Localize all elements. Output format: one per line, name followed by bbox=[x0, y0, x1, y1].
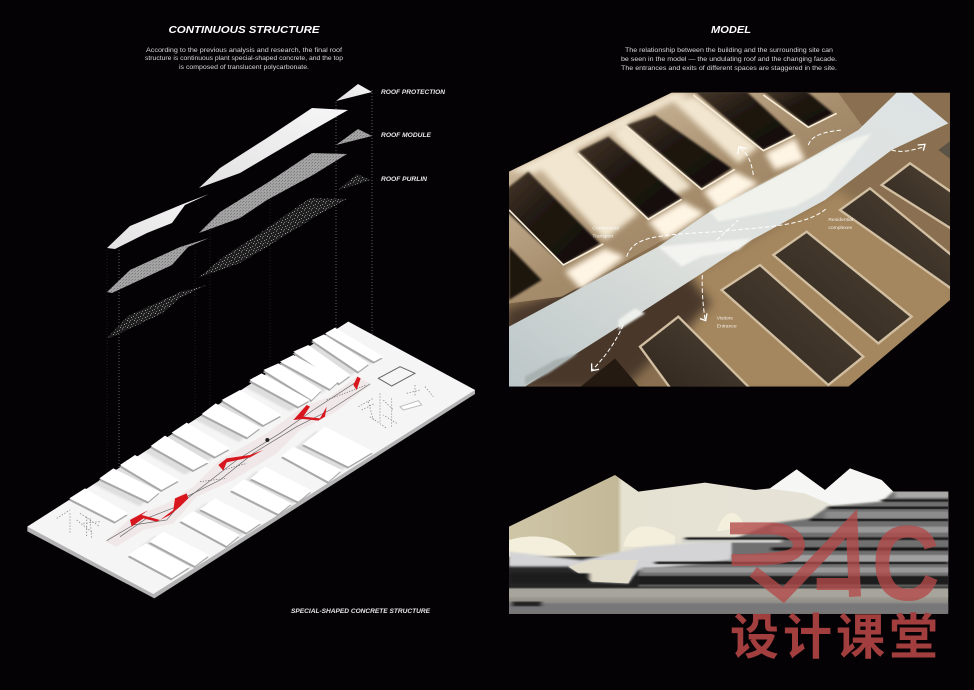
photo labels: Transport bbox=[592, 234, 614, 240]
cream glow between upper blocks bbox=[509, 93, 758, 240]
watermark chinese text: 设计课堂 bbox=[730, 611, 938, 665]
warm light pools at block ends bbox=[565, 138, 805, 290]
text block: model description: be seen in the model — the undulating roof and the changing facade. bbox=[621, 57, 837, 63]
photo labels: Commercial bbox=[592, 225, 619, 231]
photo labels: Residential bbox=[828, 217, 853, 223]
upper row of buildings bbox=[69, 328, 383, 524]
wood base bbox=[505, 90, 955, 390]
left lower shadow block bbox=[509, 247, 542, 300]
isometric site model bbox=[27, 322, 475, 598]
logo mark bbox=[730, 523, 855, 597]
roof arches bbox=[509, 513, 745, 557]
label: roof protection: ROOF PROTECTION bbox=[381, 89, 445, 96]
photo labels bbox=[592, 217, 853, 330]
text block: structure description: According to the previous analysis and research, the final roof bbox=[146, 48, 342, 54]
lower dark model blocks bbox=[640, 163, 953, 390]
title: continuous structure: CONTINUOUS STRUCTURE bbox=[168, 24, 321, 36]
dotted projection lines bbox=[107, 90, 372, 530]
text block: structure description: is composed of translucent polycarbonate. bbox=[179, 65, 309, 71]
layer: roof purlin bbox=[107, 174, 371, 338]
translucent roof strip bbox=[509, 93, 948, 387]
site base plate bbox=[27, 322, 475, 598]
label: special-shaped concrete structure: SPECIAL-SHAPED CONCRETE STRUCTURE bbox=[291, 608, 431, 615]
building shadows clipped to the plate bbox=[91, 332, 375, 571]
photo labels: Visitors bbox=[717, 315, 733, 321]
bright peak forms bbox=[768, 468, 895, 505]
lower row of buildings bbox=[128, 427, 373, 580]
model photo: aerial view bbox=[505, 90, 955, 390]
text block: model description bbox=[621, 48, 837, 72]
label: roof module: ROOF MODULE bbox=[381, 132, 432, 139]
watermark logo bbox=[730, 503, 940, 623]
roof silhouette bbox=[509, 468, 948, 560]
rock form bbox=[400, 401, 422, 410]
circulation arrows bbox=[592, 130, 924, 370]
trees bbox=[57, 385, 433, 538]
logo letter C: C bbox=[872, 503, 940, 623]
photo labels: complexes bbox=[828, 225, 853, 231]
photo labels: Entrance bbox=[717, 324, 737, 330]
title: model: MODEL bbox=[711, 24, 751, 36]
upper deck wood bbox=[509, 93, 865, 303]
light block edges bbox=[509, 95, 837, 265]
upper dark model blocks bbox=[505, 90, 833, 265]
text block: model description: The entrances and exits of different spaces are staggered in the site. bbox=[621, 66, 837, 72]
small plaza outline bbox=[378, 367, 415, 386]
layer: roof protection bbox=[107, 84, 372, 249]
model photo: side view bbox=[505, 460, 955, 617]
layer: roof module bbox=[107, 129, 372, 293]
exploded roof layers diagram bbox=[107, 84, 372, 530]
text block: model description: The relationship between the building and the surrounding site can bbox=[625, 48, 833, 54]
stepped foreground blocks bbox=[509, 557, 949, 617]
label: roof purlin: ROOF PURLIN bbox=[381, 176, 427, 183]
lower wood tone variation bbox=[692, 190, 955, 390]
central concrete structure with red sections bbox=[105, 377, 372, 547]
arrow heads bbox=[592, 144, 925, 371]
text block: structure description: structure is continuous plant special-shaped concrete, and the top bbox=[145, 56, 344, 62]
text block: structure description bbox=[145, 48, 344, 71]
